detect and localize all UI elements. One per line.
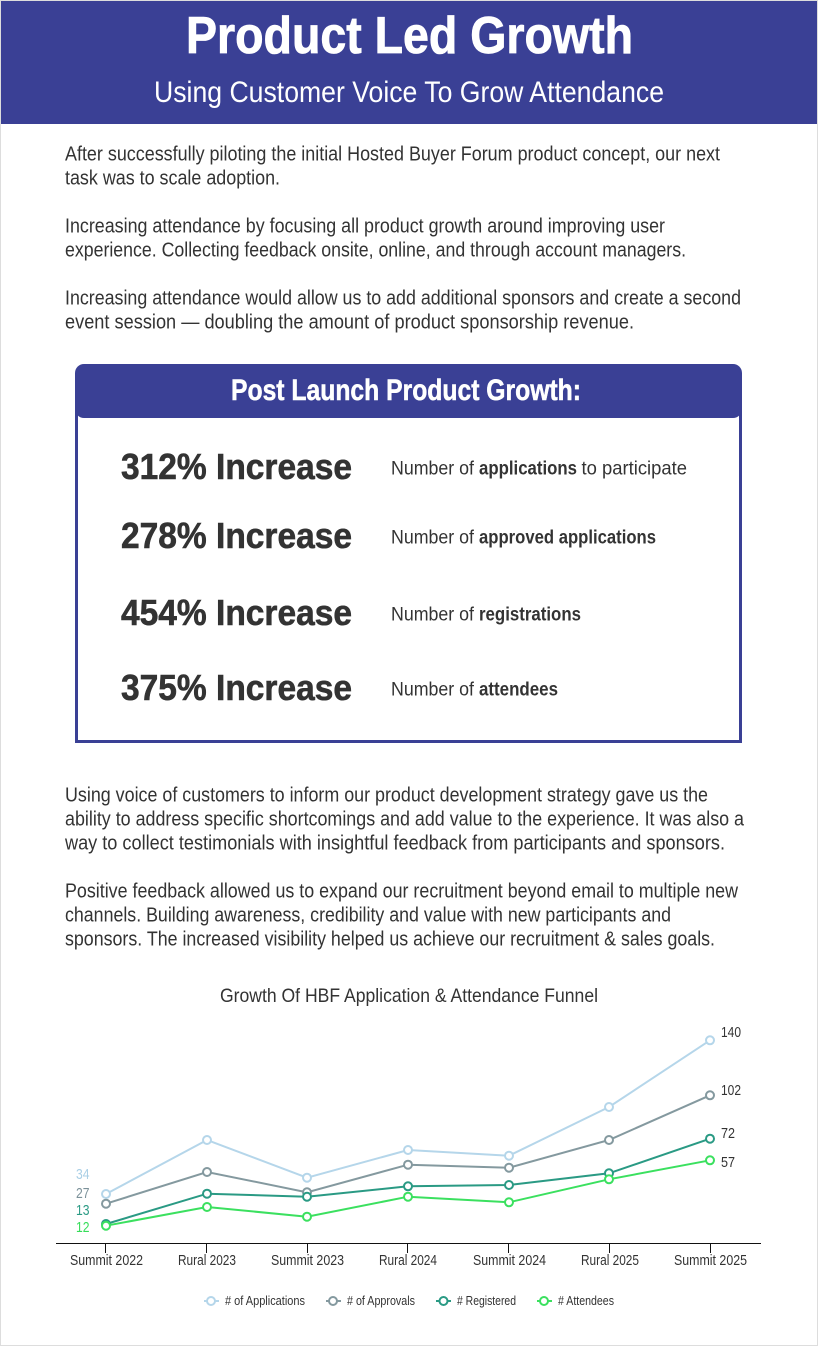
title: Product Led Growth: [186, 7, 633, 65]
subtitle: Using Customer Voice To Grow Attendance: [154, 76, 664, 109]
legend: # Attendees: [558, 1294, 614, 1308]
text block: positive feedback paragraph: Positive feedback allowed us to expand our recruitment beyond email to multiple new: [65, 880, 738, 902]
stat row: approved applications: 278% Increase: [121, 515, 352, 556]
end value labels: 102: [721, 1083, 741, 1099]
end value labels: 57: [721, 1155, 735, 1171]
x axis: Summit 2025: [674, 1253, 747, 1269]
text block: intro paragraph 3: event session — doubling the amount of product sponsorship revenue.: [65, 312, 634, 334]
text block: voice of customers paragraph: Using voice of customers to inform our product development strategy gave us the: [65, 784, 708, 806]
series: attendees: [102, 1156, 714, 1230]
panel heading bar: [75, 364, 742, 418]
legend: # of Applications: [225, 1294, 305, 1308]
end value labels: [721, 1025, 741, 1171]
stat row: registrations: Number of: [391, 604, 475, 626]
stat row: applications: [121, 446, 687, 487]
legend: [204, 1294, 614, 1308]
stat row: registrations: 454% Increase: [121, 592, 352, 633]
text block: voice of customers paragraph: [64, 784, 745, 854]
x axis: [56, 1244, 761, 1269]
end value labels: 140: [721, 1025, 741, 1041]
line chart: HBF funnel growth: [56, 985, 761, 1308]
text block: intro paragraph 2: Increasing attendance by focusing all product growth around improving user: [65, 216, 665, 238]
x axis: Summit 2023: [271, 1253, 344, 1269]
panel: post launch product growth: [75, 364, 742, 742]
stat row: attendees: attendees: [479, 678, 558, 700]
stat row: applications: to participate: [582, 458, 687, 480]
panel heading bar: Post Launch Product Growth:: [231, 374, 581, 407]
text block: positive feedback paragraph: sponsors. The increased visibility helped us achieve our recruitment & sales goals.: [65, 928, 715, 950]
start value labels: 27: [76, 1186, 90, 1202]
text block: positive feedback paragraph: channels. Building awareness, credibility and value with new participants and: [65, 904, 671, 926]
stat row: attendees: [121, 667, 558, 708]
x axis: Rural 2024: [379, 1253, 437, 1269]
stat row: applications: applications: [479, 458, 577, 480]
series: approvals: [102, 1091, 714, 1208]
stat row: registrations: registrations: [479, 604, 581, 626]
stat row: approved applications: approved applications: [479, 526, 656, 548]
stat row: attendees: Number of: [391, 678, 475, 700]
stat row: registrations: [121, 592, 581, 633]
stat row: applications: 312% Increase: [121, 446, 352, 487]
chart title: Growth Of HBF Application & Attendance Funnel: [220, 985, 598, 1007]
x axis: Summit 2024: [473, 1253, 546, 1269]
x axis: Summit 2022: [70, 1253, 143, 1269]
text block: intro paragraph 1: task was to scale adoption.: [65, 168, 280, 190]
x axis: Rural 2025: [581, 1253, 639, 1269]
legend: # Registered: [457, 1294, 516, 1308]
series: applications: [102, 1036, 714, 1198]
x axis: Rural 2023: [178, 1253, 236, 1269]
start value labels: [76, 1167, 90, 1236]
text block: voice of customers paragraph: ability to address specific shortcomings and add value to the experience. It was also a: [65, 808, 745, 830]
start value labels: 12: [76, 1220, 90, 1236]
end value labels: 72: [721, 1126, 735, 1142]
text block: intro paragraph 2: experience. Collecting feedback onsite, online, and through account managers.: [65, 240, 686, 262]
text block: voice of customers paragraph: way to collect testimonials with insightful feedback from participants and sponsors.: [64, 832, 725, 854]
stat row: applications: Number of: [391, 458, 475, 480]
text block: positive feedback paragraph: [65, 880, 738, 950]
header banner: [1, 1, 817, 124]
start value labels: 34: [76, 1167, 90, 1183]
stat row: approved applications: [121, 515, 656, 556]
text block: intro paragraph 2: [65, 216, 686, 262]
stat row: approved applications: Number of: [391, 526, 475, 548]
start value labels: 13: [76, 1203, 90, 1219]
series: registered: [102, 1135, 714, 1228]
text block: intro paragraph 3: [65, 288, 741, 334]
text block: intro paragraph 3: Increasing attendance would allow us to add additional sponsors and create a second: [65, 288, 741, 310]
text block: intro paragraph 1: [65, 144, 720, 190]
text block: intro paragraph 1: After successfully piloting the initial Hosted Buyer Forum product concept, our next: [65, 144, 720, 166]
stat row: attendees: 375% Increase: [121, 667, 352, 708]
legend: # of Approvals: [347, 1294, 415, 1308]
